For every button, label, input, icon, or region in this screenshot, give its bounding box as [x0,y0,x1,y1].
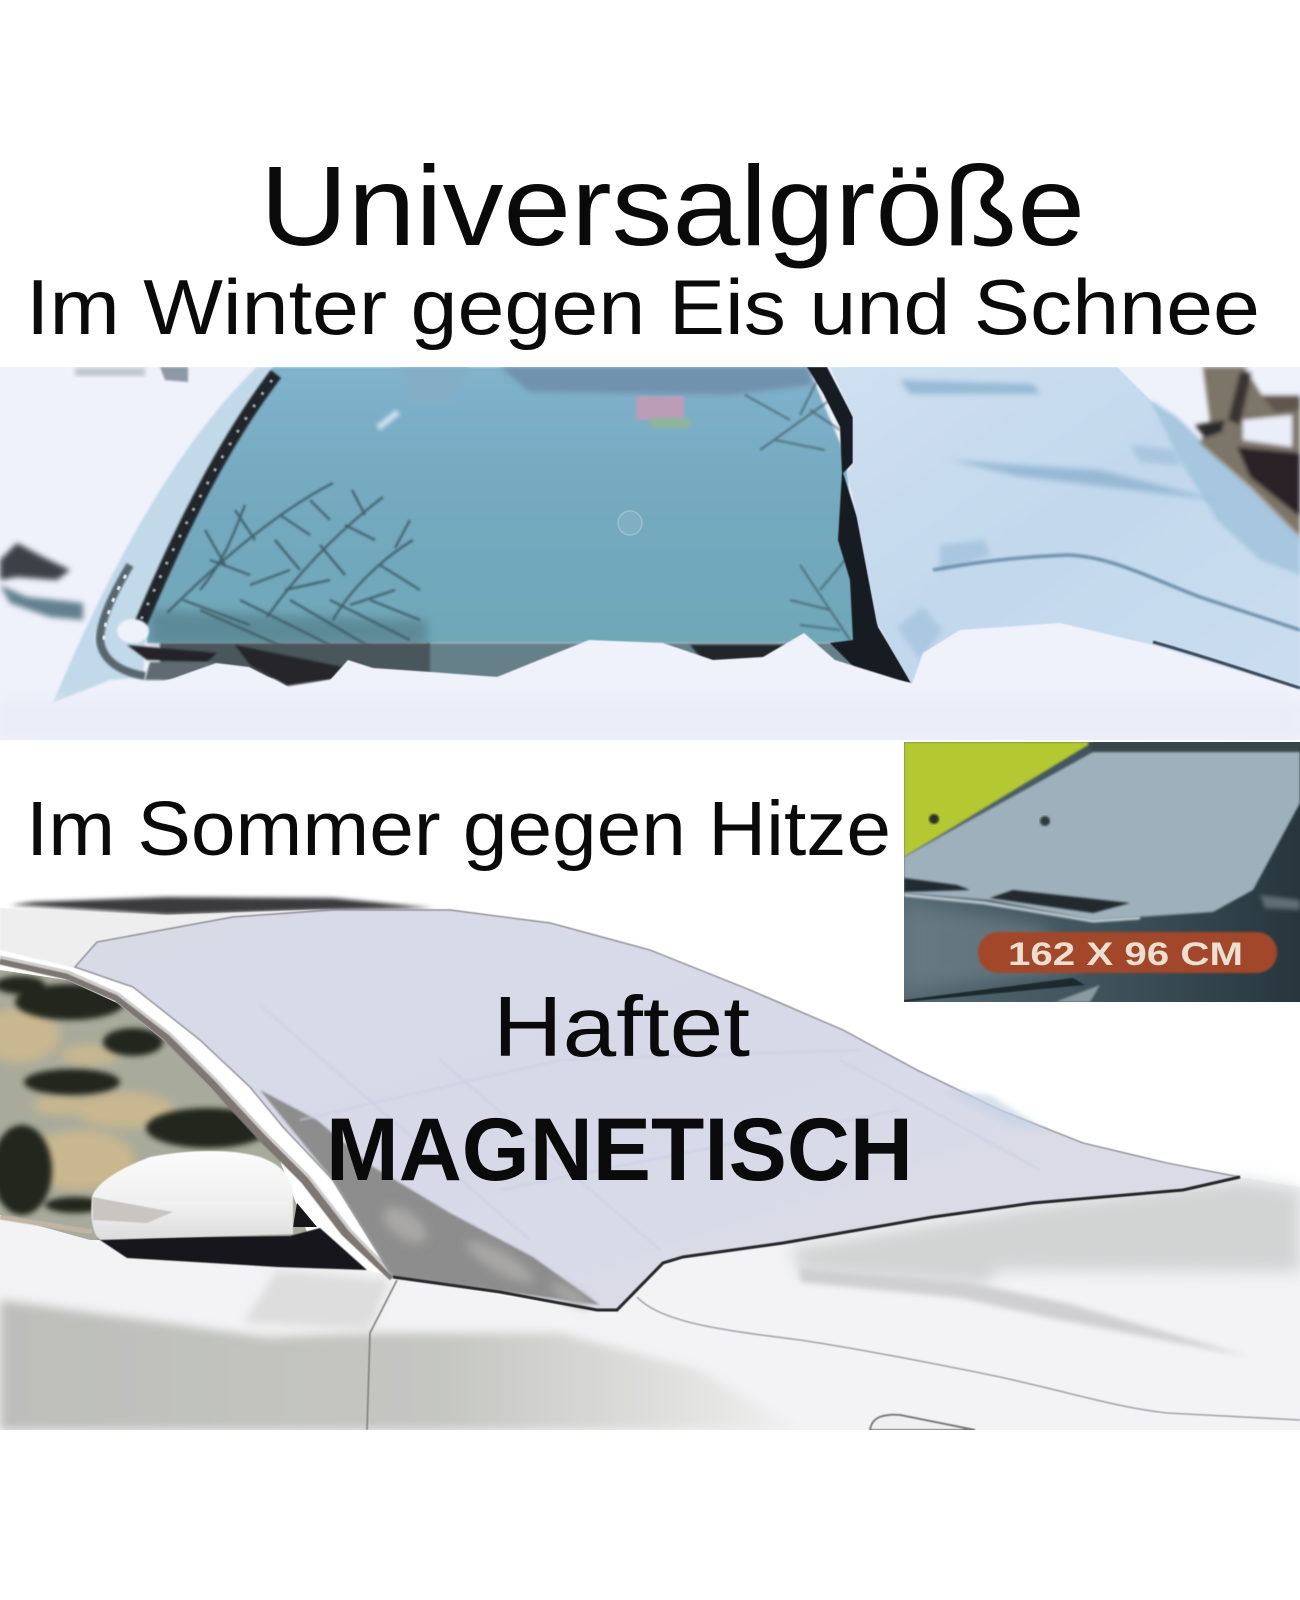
roof dark strip [10,897,433,915]
dotted left frame [139,374,276,628]
side window with reflection [0,970,307,1240]
foreground snow [164,622,1296,689]
side mirror in snow [0,543,83,620]
title: Universalgröße: Universalgröße [260,143,1085,269]
cover quilting [260,1005,1040,1250]
snowy background shapes at the top left [160,367,188,382]
mirror base patch [243,1270,390,1330]
callout text: MAGNETISCH: MAGNETISCH [326,1099,913,1199]
cover light edge [904,895,1140,921]
yellow wall [904,742,1093,857]
white roof [0,908,333,968]
chrome A-pillar [0,957,393,1277]
grey cover [904,752,1300,920]
shaded lower area of the glass [150,610,427,645]
tree reflection right [745,375,850,640]
subtitle: winter heading: Im Winter gegen Eis und Schnee [26,263,1260,351]
tree reflection left [167,483,420,650]
dark vents [990,890,1130,913]
top tinted band [500,367,812,395]
cover hem at the lower right [1153,642,1300,688]
photo: silver car with magnetic cover [0,897,1300,1430]
door seam [367,1280,397,1430]
sensor circle [618,511,642,535]
cover edge on right [1150,400,1300,575]
dimensions label: 162 X 96 CM [1008,936,1243,972]
mottled highlights on inner side [377,1200,592,1311]
photo: snowy windshield with cover [0,367,1300,740]
car body [0,1177,1300,1430]
callout text: Haftet: Haftet [493,980,750,1075]
windshield sticker [636,396,684,420]
hood seam [637,1297,1300,1420]
top dark band [1088,742,1300,757]
windshield glass [147,367,860,643]
silver cover on windshield [830,367,1300,690]
dark frame pillar right [807,367,912,683]
pale blue A-pillar [53,367,273,703]
window sill trim [0,1217,92,1232]
cover folds [897,380,1217,660]
hood shading [790,1180,1300,1285]
cover hem [393,1177,1240,1310]
magnetic cover [75,910,1240,1310]
side lamp [870,1415,975,1430]
frame tube at lower left [100,565,145,676]
dark inner side of cover [260,1090,600,1305]
hood crease [800,1268,1250,1357]
magnet dots [929,814,939,824]
wipers [127,645,217,662]
subtitle: summer heading: Im Sommer gegen Hitze [26,786,891,872]
tree at top right [1195,367,1300,537]
hood sheen [904,905,1080,990]
dimensions badge [978,932,1277,973]
frost streak [378,412,398,428]
lower windshield strip [427,643,867,678]
photo: size inset with dimensions [904,742,1300,1002]
cover fold near the front edge [940,1090,1045,1130]
side mirror [91,1151,367,1270]
long crease in the cover [933,555,1300,630]
grey lower door [0,1300,800,1430]
